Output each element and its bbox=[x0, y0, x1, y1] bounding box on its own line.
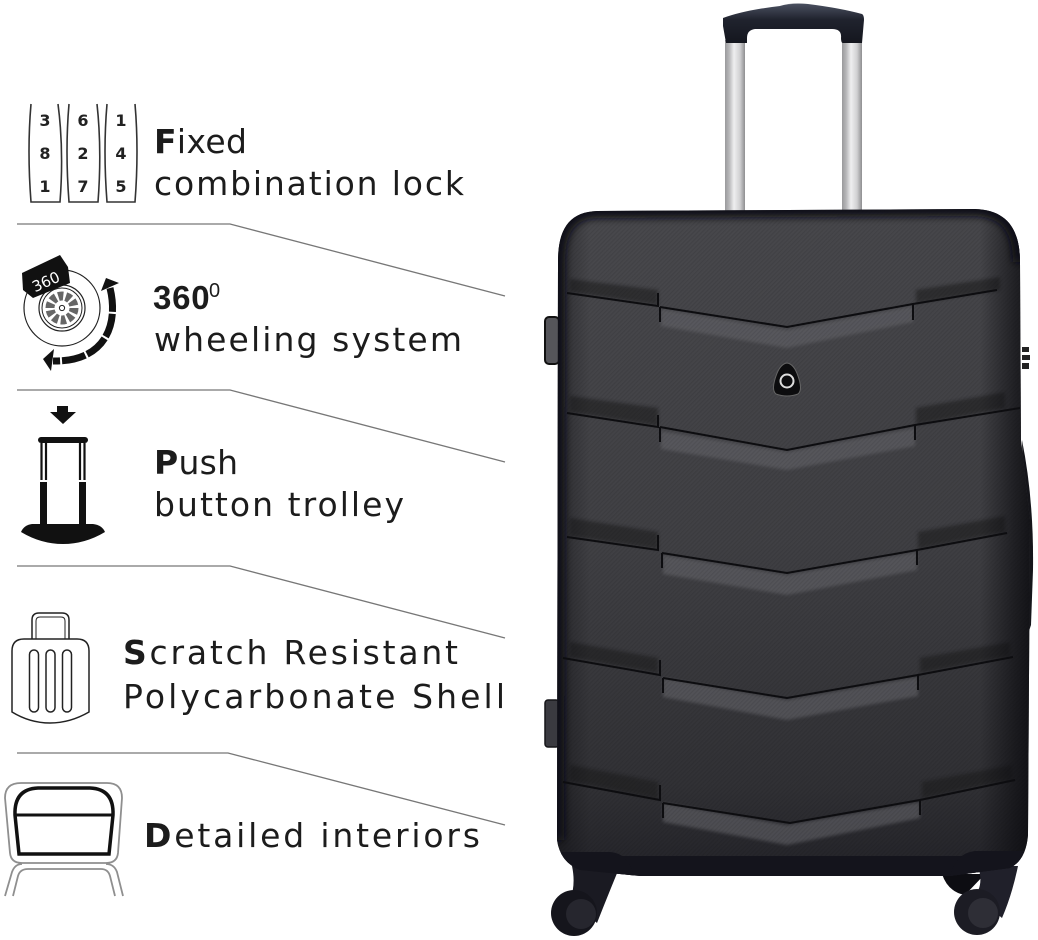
icon: combination lock: 7 bbox=[77, 177, 89, 196]
label: scratch resistant polycarbonate shell: Polycarbonate Shell bbox=[123, 677, 505, 716]
label: fixed combination lock: Fixed bbox=[154, 122, 247, 161]
icon: combination lock bbox=[29, 104, 137, 202]
feature: 360 wheeling system bbox=[22, 255, 462, 371]
feature: push button trolley bbox=[21, 406, 404, 544]
label: 360 wheeling system: wheeling system bbox=[154, 320, 462, 359]
label: push button trolley bbox=[154, 443, 404, 524]
right caster bbox=[954, 866, 1018, 935]
feature: fixed combination lock bbox=[29, 104, 465, 203]
label: 360 wheeling system bbox=[153, 279, 462, 359]
label: scratch resistant polycarbonate shell: Scratch Resistant bbox=[123, 633, 458, 672]
telescopic handle bbox=[723, 3, 864, 212]
icon: 360 wheel bbox=[22, 255, 119, 371]
darker side strips bbox=[570, 277, 1012, 799]
suitcase shell body bbox=[540, 200, 1038, 890]
icon: suitcase shell bbox=[12, 613, 89, 723]
label: fixed combination lock: combination lock bbox=[154, 164, 465, 203]
chevron highlight strips bbox=[661, 306, 920, 845]
side handles and lock bbox=[545, 317, 1033, 747]
feature: detailed interiors bbox=[5, 783, 480, 896]
suitcase photo illustration bbox=[540, 3, 1038, 936]
chevron rib lines bbox=[563, 290, 1020, 823]
left caster bbox=[551, 866, 620, 936]
label: fixed combination lock bbox=[154, 122, 465, 203]
label: 360 wheeling system: 360 bbox=[153, 279, 210, 316]
back right wheel bbox=[942, 874, 985, 895]
icon: combination lock: 4 bbox=[115, 144, 127, 163]
icon: 360 wheel: 360 bbox=[29, 268, 63, 296]
icon: combination lock: 2 bbox=[77, 144, 89, 163]
icon: combination lock: 5 bbox=[115, 177, 127, 196]
label: detailed interiors: Detailed interiors bbox=[144, 816, 480, 855]
label: push button trolley: Push bbox=[154, 443, 238, 482]
icon: combination lock: 3 bbox=[39, 111, 51, 130]
label: 360 wheeling system: 0 bbox=[209, 280, 220, 302]
icon: interior pocket bbox=[5, 783, 123, 896]
icon: combination lock: 1 bbox=[39, 177, 51, 196]
icon: combination lock: 1 bbox=[115, 111, 127, 130]
icon: trolley handle bbox=[21, 406, 105, 544]
icon: combination lock: 8 bbox=[39, 144, 51, 163]
label: push button trolley: button trolley bbox=[154, 485, 404, 524]
logo badge bbox=[774, 363, 800, 396]
rim shading bbox=[557, 209, 1020, 840]
feature: scratch resistant polycarbonate shell bbox=[12, 613, 505, 723]
icon: combination lock: 6 bbox=[77, 111, 89, 130]
wheels bbox=[551, 866, 1018, 936]
panel: feature list bbox=[5, 104, 505, 896]
label: scratch resistant polycarbonate shell bbox=[123, 633, 505, 716]
